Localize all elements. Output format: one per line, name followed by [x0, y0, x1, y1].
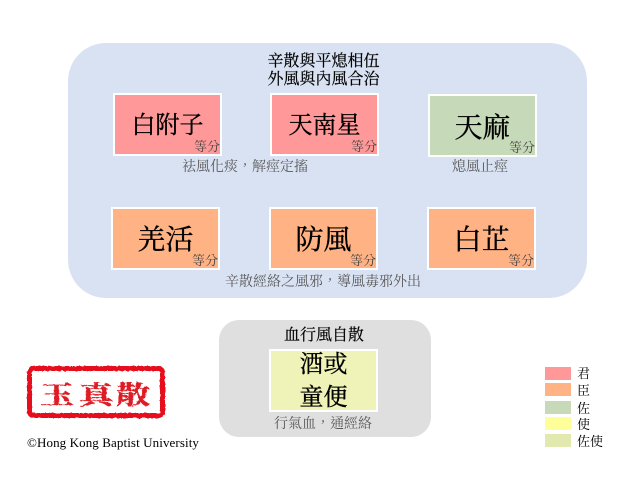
herb: 白芷	[427, 207, 536, 270]
panel: blood moves wind	[219, 320, 431, 437]
herb: 天南星: 天南星	[288, 113, 360, 139]
note: 祛風化痰: 祛風化痰，解痙定搐	[182, 160, 308, 175]
stamp: 玉真散: 散	[116, 375, 150, 412]
herb: 羌活: 等分	[192, 253, 218, 268]
herb: 防風: 防風	[295, 225, 352, 256]
heading: main treatment principle: 外風與內風合治	[267, 71, 380, 88]
herb: 羌活	[111, 207, 220, 270]
herb: 天麻: 等分	[509, 140, 535, 155]
herb: 白附子	[113, 93, 222, 156]
herb: 天南星: 等分	[351, 139, 377, 154]
heading: main treatment principle	[267, 52, 380, 88]
legend	[545, 366, 603, 449]
note: 行氣血: 行氣血，通經絡	[274, 417, 372, 432]
note: 辛散經絡之風邪: 辛散經絡之風邪，導風毒邪外出	[225, 275, 421, 290]
copyright: ©Hong Kong Baptist University	[27, 435, 199, 450]
herb: 白芷: 等分	[508, 253, 534, 268]
text: 使	[577, 417, 590, 432]
text: 君	[577, 366, 590, 381]
heading: 血行風自散: 血行風自散	[284, 327, 364, 344]
herb: 白附子: 等分	[194, 139, 220, 154]
stamp: 玉真散	[26, 366, 166, 419]
herb: 天南星	[270, 93, 379, 156]
text: 佐	[577, 401, 590, 416]
herb: 防風: 等分	[350, 253, 376, 268]
herb: 酒或童便	[269, 349, 378, 412]
text: 佐使	[577, 434, 603, 449]
herb: 天麻	[428, 94, 537, 157]
note: 熄風止痙: 熄風止痙	[452, 160, 508, 175]
herb: 白附子: 白附子	[132, 113, 204, 139]
herb: 天麻: 天麻	[454, 113, 510, 144]
herb: 防風	[269, 207, 378, 270]
text: 臣	[577, 383, 590, 398]
herb: 酒或童便: 酒或	[300, 352, 348, 378]
herb: 羌活: 羌活	[137, 225, 194, 256]
herb: 白芷: 白芷	[453, 225, 510, 256]
stamp: 玉真散: 玉	[40, 375, 74, 412]
panel: disperse wind group	[68, 43, 587, 298]
herb: 酒或童便: 童便	[300, 385, 348, 411]
heading: main treatment principle: 辛散與平熄相伍	[267, 53, 380, 70]
stamp: 玉真散: 真	[79, 375, 117, 412]
